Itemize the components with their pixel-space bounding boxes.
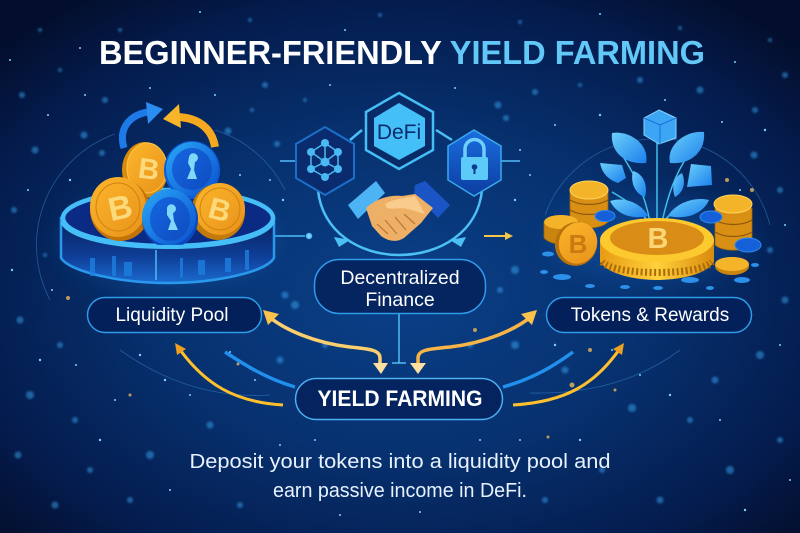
panel: tokens and rewards	[540, 110, 761, 290]
coin: gold left: B	[105, 187, 136, 228]
decentralized finance label: Decentralized	[340, 267, 460, 289]
description	[190, 451, 610, 502]
pool wall	[61, 218, 274, 283]
decentralized finance label: Finance	[365, 289, 435, 311]
connector lines	[262, 161, 520, 363]
ground dots	[540, 252, 759, 290]
tokens and rewards label	[546, 298, 752, 332]
description: Deposit your tokens into a liquidity pool and	[190, 451, 610, 473]
ring	[318, 190, 482, 255]
coin: gold left	[90, 177, 150, 241]
coin: gold right: B	[205, 192, 234, 229]
panel: liquidity pool	[61, 102, 274, 283]
cube	[644, 110, 676, 144]
yield farming label	[296, 378, 502, 420]
leaves	[600, 132, 712, 217]
icon: lock hexagon	[448, 130, 501, 196]
blue tokens	[595, 210, 761, 252]
liquidity pool label: Liquidity Pool	[115, 305, 229, 326]
icon: handshake	[348, 181, 450, 241]
ring upper segments	[350, 130, 452, 140]
big bitcoin coin	[600, 218, 714, 280]
coin stack right	[714, 195, 752, 250]
arrow: lower left gold	[175, 343, 283, 405]
small coin right	[715, 257, 749, 275]
arrow: yield farming to tokens	[410, 310, 537, 374]
coin: gold right	[191, 183, 245, 240]
decentralized finance label	[314, 260, 486, 314]
coin: gold back left: B	[136, 153, 161, 187]
ring arrowheads	[334, 237, 466, 247]
arrow: orange cycle	[163, 104, 215, 147]
description: earn passive income in DeFi.	[273, 480, 527, 502]
yield farming label: YIELD FARMING	[318, 386, 482, 411]
coin stack far left	[544, 215, 579, 244]
coin: gold back left	[122, 142, 168, 198]
wall ticks	[90, 250, 249, 280]
panel: DeFi icons	[296, 93, 501, 255]
background orbit arcs	[36, 130, 770, 395]
arrow: yield farming to liquidity pool	[263, 310, 388, 374]
big bitcoin coin: B	[648, 223, 668, 255]
liquidity pool label	[88, 298, 262, 332]
title: BEGINNER-FRIENDLY YIELD FARMING	[99, 35, 705, 72]
coin: blue back right	[164, 141, 220, 199]
coin stack left	[570, 181, 608, 228]
plant stems	[612, 140, 705, 222]
pool inner	[63, 190, 273, 246]
glow under coins	[550, 200, 750, 280]
arrow: to tokens connector	[484, 232, 513, 240]
coin: blue front	[142, 189, 198, 248]
small tilted coin: B	[569, 229, 587, 259]
glow under pool	[63, 198, 273, 282]
pool front rim	[62, 222, 273, 247]
blue glow arcs	[225, 352, 573, 387]
small tilted coin	[549, 216, 603, 272]
icon: DeFi hexagon: DeFi	[377, 121, 421, 144]
arrow: blue cycle	[122, 102, 163, 148]
icon: network hexagon	[296, 127, 354, 195]
icon: DeFi hexagon	[366, 93, 433, 169]
arrow: lower right gold	[513, 343, 624, 405]
tokens and rewards label: Tokens & Rewards	[571, 305, 729, 326]
